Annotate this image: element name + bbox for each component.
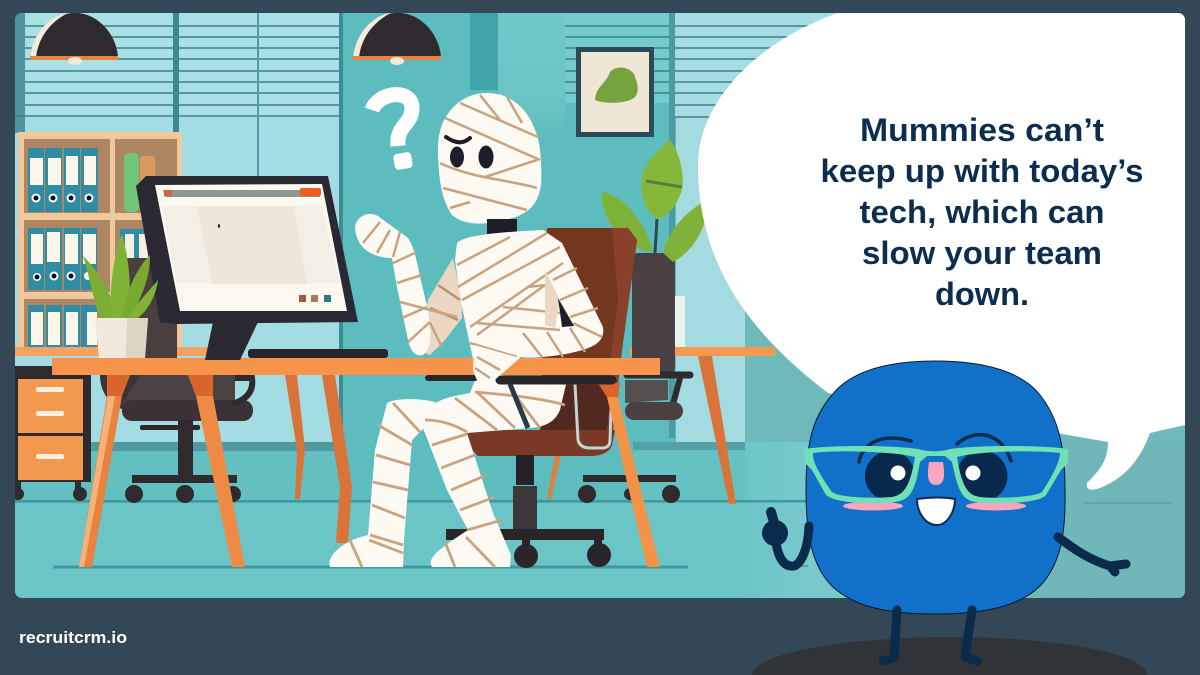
mummy: raised arm (355, 214, 457, 355)
office chair (446, 228, 637, 568)
lamp: left (30, 13, 118, 65)
mascot: body (806, 361, 1065, 614)
lamp: right (353, 13, 441, 65)
mascot: cheeks (843, 502, 1026, 510)
plant: right (602, 140, 709, 262)
plant: on desk (83, 234, 158, 358)
ground shadow (752, 637, 1147, 675)
mummy: near leg (423, 380, 567, 567)
mascot: eyes (865, 450, 1008, 502)
window: right (470, 13, 842, 503)
mummy: far leg (329, 399, 440, 567)
binders: middle shelf (28, 228, 148, 290)
floor (15, 503, 1185, 598)
bookcase (18, 132, 182, 354)
back chair: right (578, 253, 690, 503)
mascot: right arm (1058, 537, 1126, 572)
books (124, 153, 155, 212)
speech bubble text: Mummies can’t (860, 112, 1104, 148)
binders: bottom shelf (28, 305, 97, 349)
monitor (136, 176, 358, 360)
keyboard (248, 349, 388, 358)
back chair: left (100, 258, 253, 503)
mascot: nose (928, 462, 944, 485)
mascot: eyebrows (859, 435, 1011, 462)
picture frame (576, 47, 654, 137)
distant lines (1083, 502, 1172, 504)
mummy: hand over desk (473, 345, 520, 380)
chair armrests (428, 378, 612, 428)
window: left (15, 13, 343, 451)
mascot: mouth (917, 498, 955, 525)
speech bubble (698, 13, 1185, 490)
mummy: legs (329, 380, 567, 567)
drawer unit (12, 366, 91, 501)
mummy: rear arm (425, 258, 462, 355)
speech bubble text (820, 112, 1144, 312)
background beneath bubble (745, 300, 1185, 598)
speech bubble text: keep up with today’s (820, 153, 1144, 189)
floor lines (15, 500, 810, 567)
back desk legs (285, 375, 561, 543)
desk (52, 358, 660, 567)
back desk (15, 347, 775, 504)
question mark (372, 95, 413, 170)
speech bubble text: down. (935, 276, 1029, 312)
mascot: glasses (804, 446, 1068, 503)
speech bubble text: tech, which can (860, 194, 1104, 230)
mascot: legs (883, 610, 977, 661)
mummy: torso and arm (455, 230, 603, 385)
footer brand: recruitcrm.io (19, 629, 127, 647)
mascot (762, 361, 1126, 661)
speech bubble text: slow your team (862, 235, 1102, 271)
mummy: neck (487, 219, 517, 236)
binders: top shelf (28, 148, 98, 212)
mummy: head (438, 93, 541, 224)
mascot: left arm (762, 512, 809, 566)
mummy (355, 93, 603, 385)
teal wall (15, 13, 1185, 503)
